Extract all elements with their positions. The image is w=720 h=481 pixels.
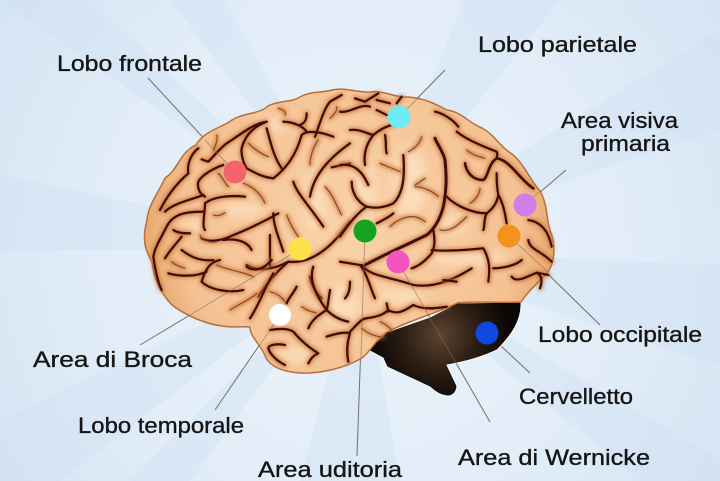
cerebrum outline xyxy=(144,89,554,373)
marker: cervelletto xyxy=(476,322,498,344)
label: Area visiva primaria: Area visiva xyxy=(561,108,679,133)
sulci: back lobe detail xyxy=(340,93,552,298)
label: Lobo temporale: Lobo temporale xyxy=(78,413,244,438)
sulci: temporal lobe detail xyxy=(230,260,457,365)
gyri highlights xyxy=(181,118,510,363)
sulci: front lobe detail xyxy=(153,95,350,298)
cerebellum xyxy=(368,302,521,396)
label: Area di Wernicke: Area di Wernicke xyxy=(458,445,650,470)
marker: lobo temporale xyxy=(269,304,291,326)
label: Area visiva primaria xyxy=(561,108,679,156)
label: Lobo parietale: Lobo parietale xyxy=(478,32,637,57)
label leader lines xyxy=(140,70,600,456)
marker: area di Broca xyxy=(288,238,312,260)
marker: lobo frontale xyxy=(224,160,246,184)
marker: area di Wernicke xyxy=(386,250,410,274)
marker: area visiva primaria xyxy=(514,194,536,216)
label: Area visiva primaria: primaria xyxy=(581,131,671,156)
label: Lobo occipitale: Lobo occipitale xyxy=(538,322,702,347)
marker: area uditoria xyxy=(354,220,376,242)
marker: lobo occipitale xyxy=(498,224,520,248)
marker: lobo parietale xyxy=(388,106,410,128)
label: Area di Broca: Area di Broca xyxy=(33,347,193,372)
brain xyxy=(144,89,554,373)
label: Cervelletto: Cervelletto xyxy=(519,384,633,409)
faint leader lines across the brain xyxy=(190,96,548,365)
label: Lobo frontale: Lobo frontale xyxy=(57,51,202,76)
